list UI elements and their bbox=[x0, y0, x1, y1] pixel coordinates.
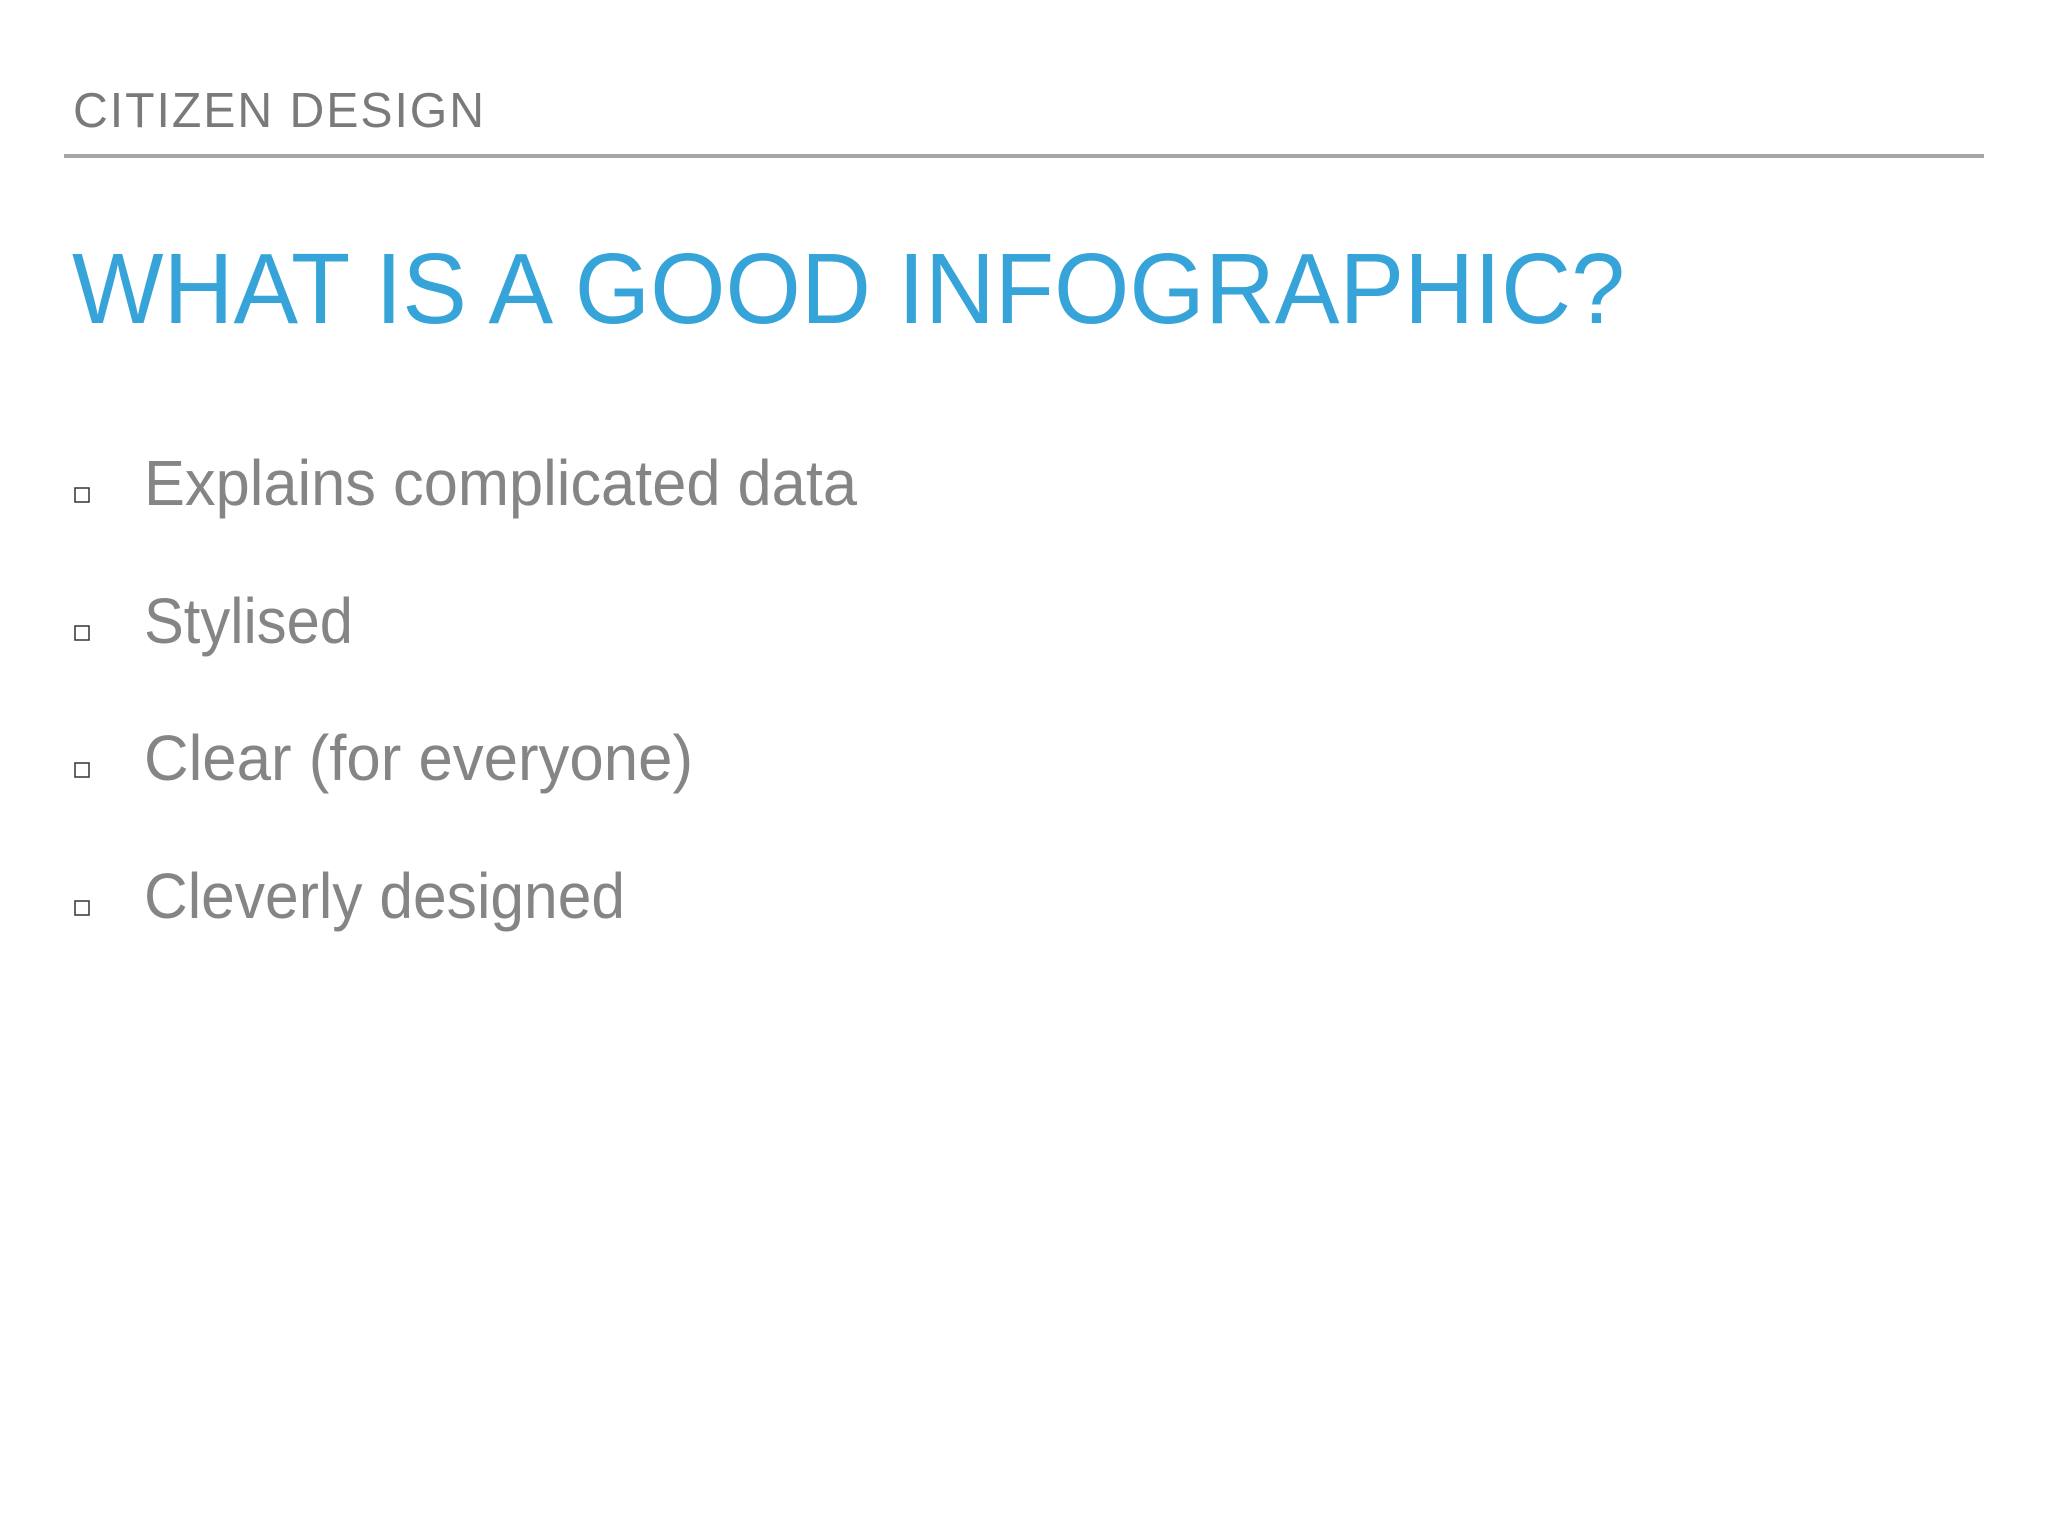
bullet 4: Cleverly designed bbox=[144, 860, 625, 932]
bullet 2: Stylised bbox=[144, 585, 353, 657]
bullet 1: Explains complicated data bbox=[144, 447, 857, 519]
header: citizen design: CITIZEN DESIGN bbox=[73, 84, 486, 138]
bullet list bbox=[75, 447, 857, 932]
bullet 3: Clear (for everyone) bbox=[144, 722, 693, 794]
title: WHAT IS A GOOD INFOGRAPHIC? bbox=[72, 233, 1625, 345]
